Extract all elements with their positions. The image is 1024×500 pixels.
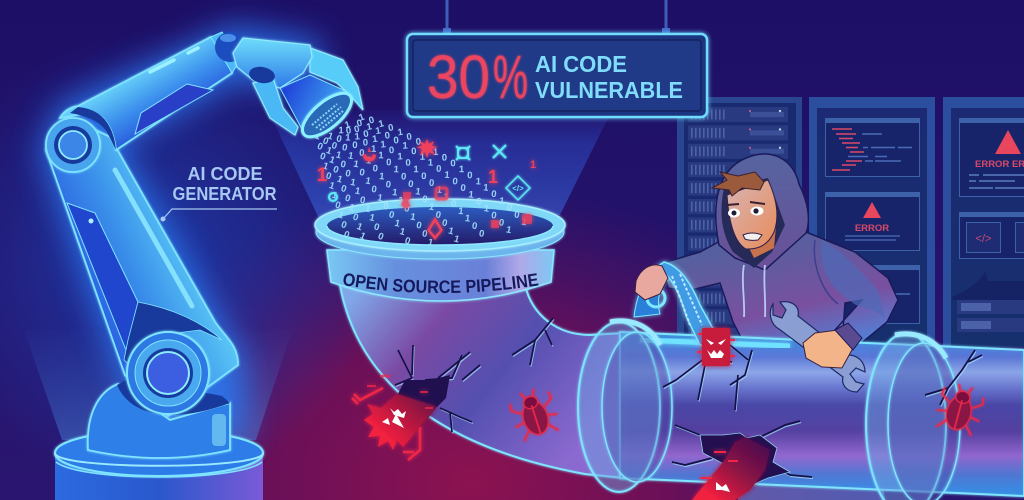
eyes and brows xyxy=(727,202,765,218)
rack 2 xyxy=(809,97,935,347)
crack hole: bottom xyxy=(700,433,790,490)
screen: error alert large xyxy=(959,118,1024,196)
pedestal xyxy=(55,430,263,500)
label: AI code generator: GENERATOR xyxy=(172,184,277,204)
label: AI code generator: AI CODE xyxy=(187,164,263,184)
sign: 30% AI code vulnerable xyxy=(407,0,707,117)
upper arm panel xyxy=(135,84,213,134)
hood xyxy=(716,154,808,270)
red glitch glyphs: 1 xyxy=(317,165,328,186)
code scroll in hand xyxy=(634,262,722,345)
red beetle: elbow xyxy=(506,384,562,443)
red monster: bursting left crack xyxy=(352,376,437,460)
funnel: open source pipeline xyxy=(312,196,568,304)
cyan tech glyphs xyxy=(329,145,530,201)
rack 1 xyxy=(677,97,802,347)
sign statistic: % xyxy=(493,43,528,111)
base dark crescent xyxy=(117,378,230,415)
arm lower dark plate xyxy=(124,302,222,370)
label: AI code generator xyxy=(160,164,277,222)
sign statistic: 30 xyxy=(427,43,490,111)
code tag glyph: </> xyxy=(512,184,524,193)
screen: code tag: </> xyxy=(976,233,991,245)
torso xyxy=(663,232,898,350)
icon: warning triangle xyxy=(863,202,881,218)
binary code stream xyxy=(314,114,526,246)
sign panel xyxy=(407,34,707,117)
server racks xyxy=(677,97,1024,347)
red glitch glyphs xyxy=(317,139,536,240)
wrist joint xyxy=(211,32,245,73)
nozzle cone xyxy=(280,75,348,135)
funnel band xyxy=(327,250,554,301)
red glitch glyphs: 1 xyxy=(530,159,536,171)
shoulder dark collar xyxy=(70,107,116,150)
icon: warning triangle xyxy=(995,130,1021,154)
neck xyxy=(748,226,776,258)
left hand xyxy=(635,265,668,300)
screen: code listing xyxy=(825,118,920,176)
screen: dim panel xyxy=(825,265,920,324)
shoulder joint xyxy=(46,118,100,172)
arm highlight xyxy=(115,170,192,306)
right hand gripping wrench xyxy=(803,323,862,368)
gripper upper finger xyxy=(310,48,363,110)
funnel front rim xyxy=(327,226,553,245)
error label: ERROR xyxy=(855,223,889,234)
light cone: funnel projector xyxy=(268,110,612,225)
flange: left xyxy=(578,321,672,492)
hoodie strings xyxy=(743,265,765,317)
screen: error alert xyxy=(825,192,920,250)
funnel: open source pipeline: OPEN SOURCE PIPELINE xyxy=(344,273,538,294)
hanging rods xyxy=(447,0,666,30)
cracks in pipe xyxy=(395,318,983,478)
screen: code tag xyxy=(959,212,1024,258)
flange: right xyxy=(866,333,960,500)
legs behind pipe xyxy=(738,345,885,500)
floating symbols xyxy=(317,139,536,240)
sign caption: AI CODE xyxy=(535,51,627,77)
light cone: pedestal projector xyxy=(24,330,292,440)
pipe straight section xyxy=(620,332,1024,496)
face xyxy=(727,180,777,249)
base dome xyxy=(88,384,230,458)
gripper palm xyxy=(233,38,312,88)
pipe top glow xyxy=(640,340,790,346)
red beetle: right pipe xyxy=(933,380,987,437)
sign caption xyxy=(535,51,683,103)
elbow base joint xyxy=(127,332,209,414)
hooded developer body xyxy=(663,154,898,500)
red glitch glyphs: 1 xyxy=(488,167,498,187)
gripper thumb xyxy=(253,78,298,135)
red monster: on pipe top xyxy=(697,328,735,366)
sign caption: VULNERABLE xyxy=(535,77,683,103)
upper arm xyxy=(60,37,232,150)
crack hole: left xyxy=(395,375,450,428)
nozzle mouth xyxy=(296,86,358,144)
arm side panel xyxy=(67,203,138,350)
funnel rim xyxy=(316,205,564,259)
arm halo xyxy=(40,25,320,440)
mouth xyxy=(743,233,762,240)
pipe elbow xyxy=(340,285,625,478)
red monster: bottom xyxy=(692,437,770,500)
funnel opening xyxy=(327,207,553,245)
pipeline label xyxy=(342,285,541,293)
robot arm: AI code generator xyxy=(40,25,363,500)
wrench xyxy=(770,302,865,392)
hair xyxy=(712,172,764,196)
rack 3 xyxy=(943,97,1024,347)
lower arm xyxy=(46,118,238,416)
hood opening xyxy=(721,178,785,268)
